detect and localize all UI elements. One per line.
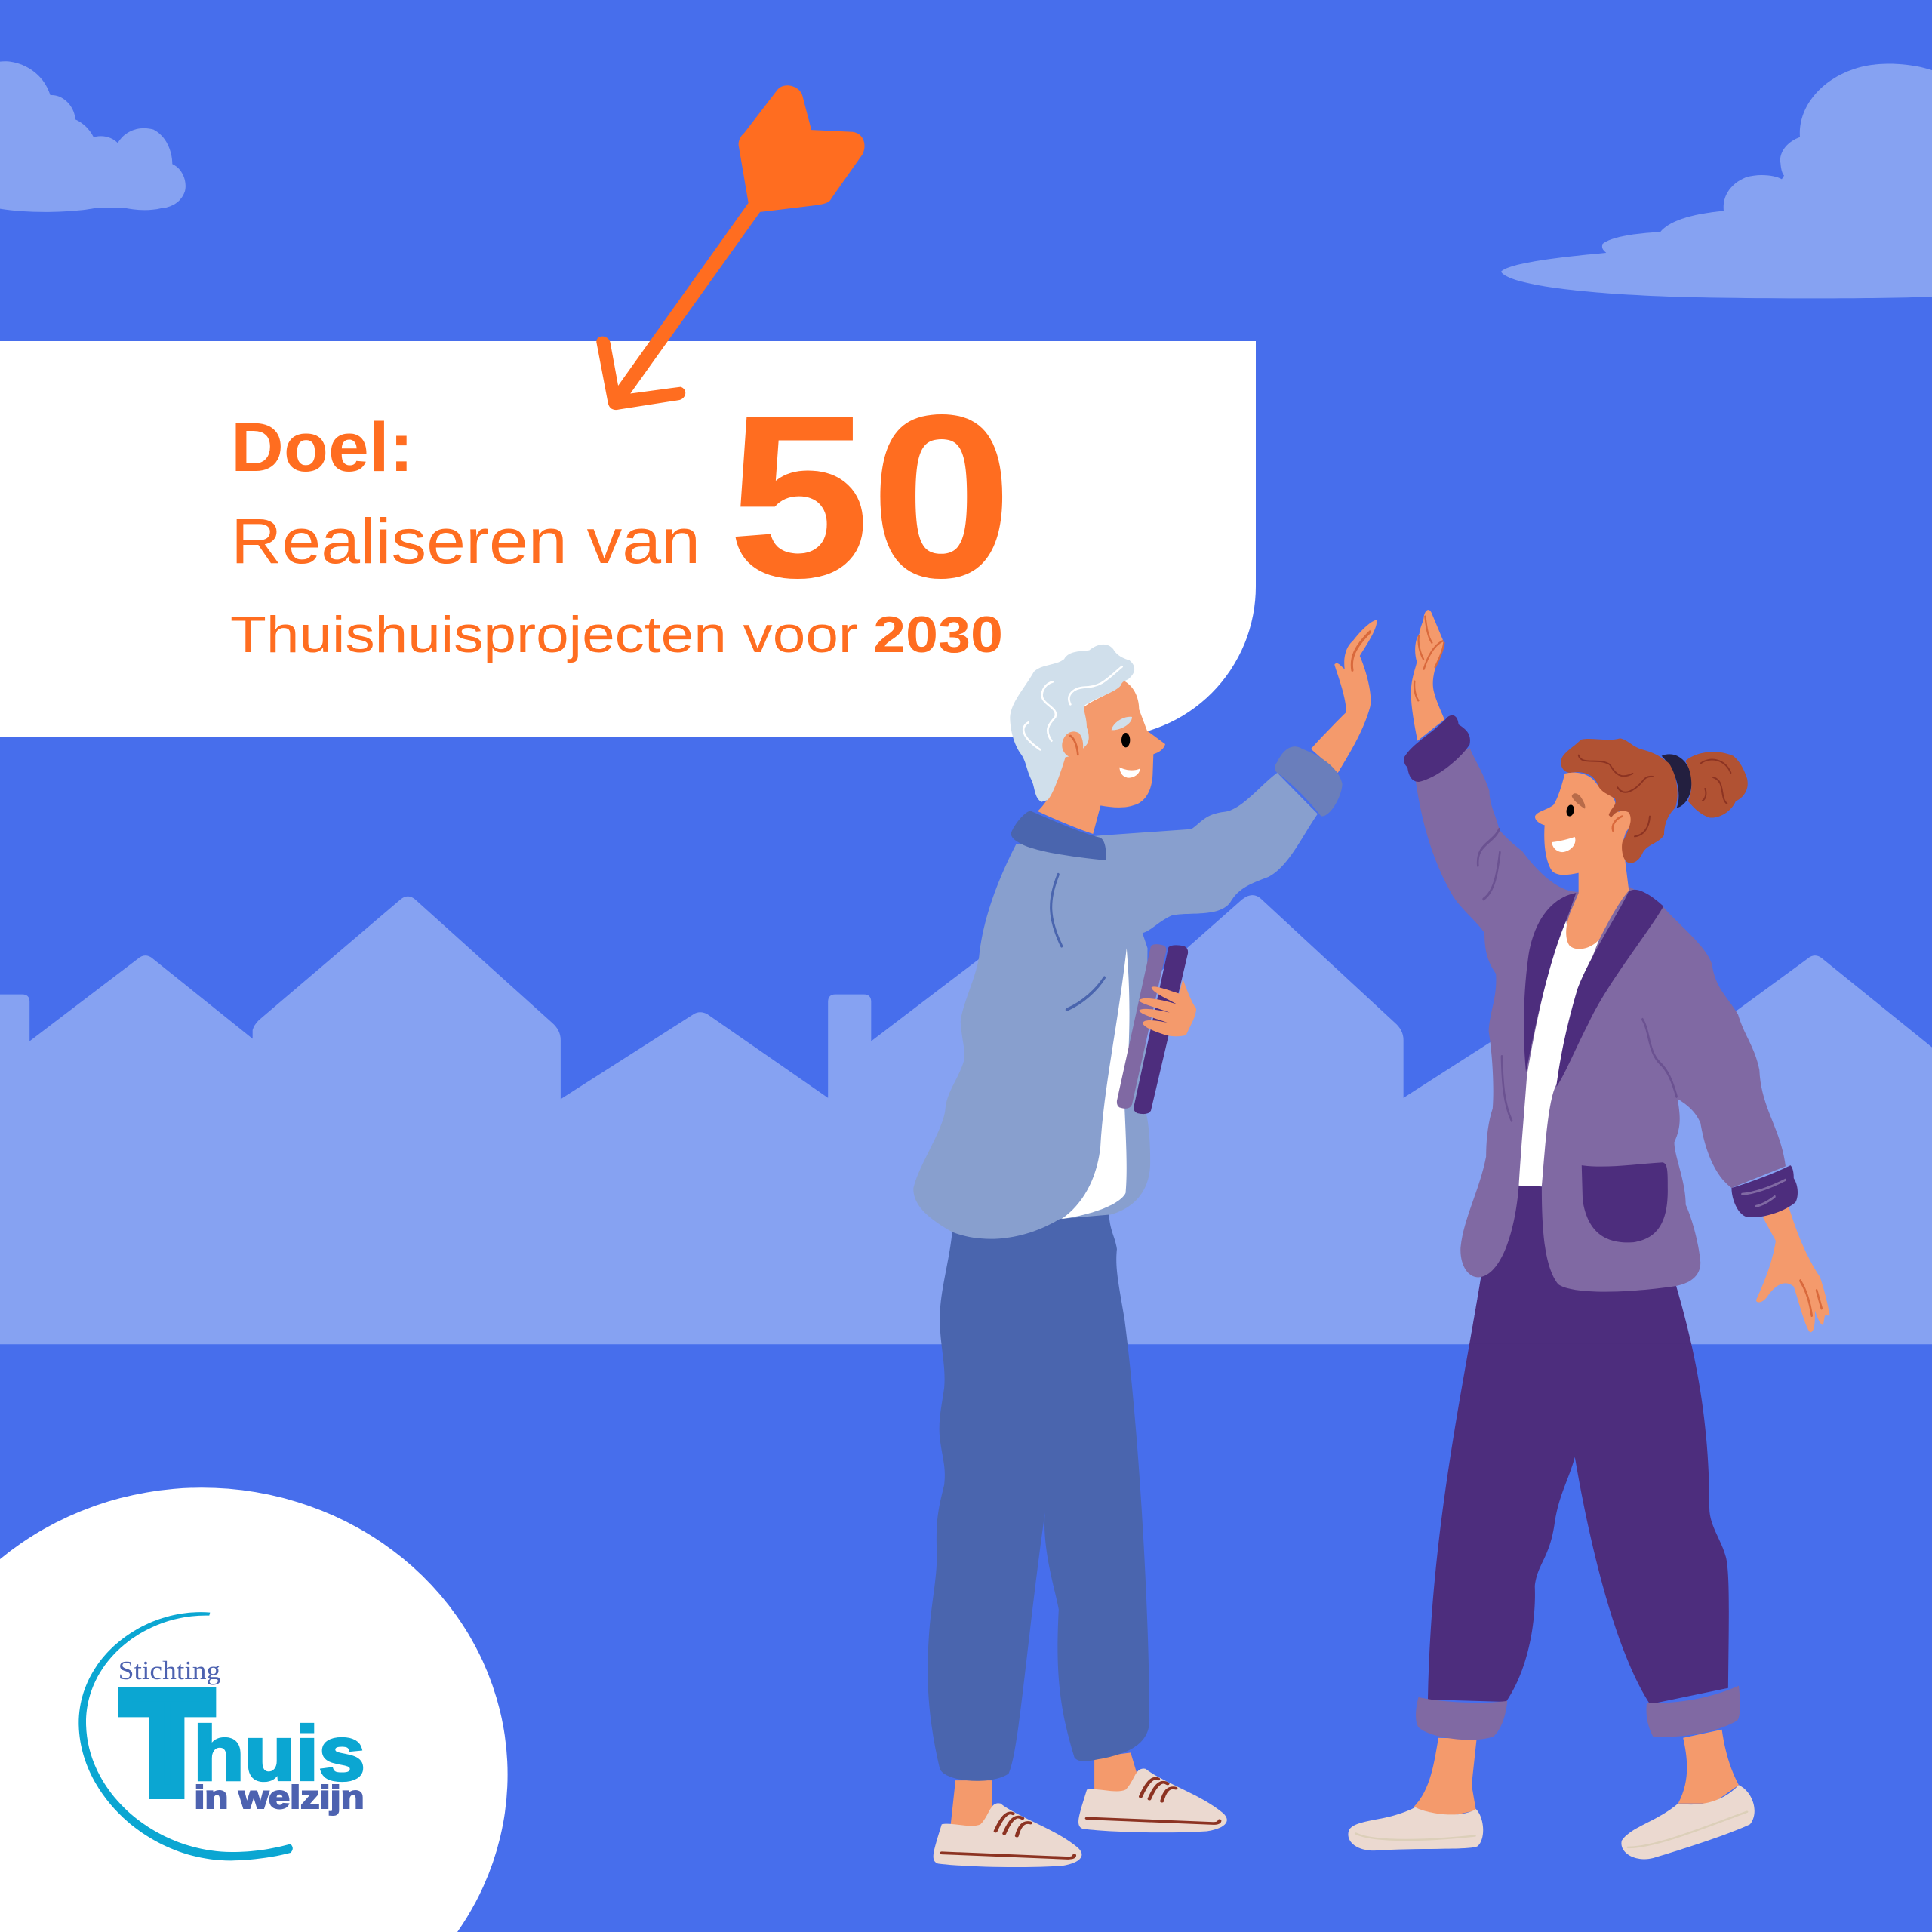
- woman raised arm: [1404, 610, 1470, 782]
- trousers: [1428, 1277, 1729, 1704]
- ankles: [1414, 1730, 1739, 1817]
- logo circle with logo: [0, 1487, 508, 1932]
- big number: 50: 50: [728, 367, 1013, 626]
- text: 2030: 2030: [873, 606, 1003, 663]
- figure: woman: [1348, 610, 1830, 1859]
- logo word: Stichting: Stichting: [118, 1656, 220, 1685]
- left trouser cuff: [1416, 1697, 1507, 1740]
- eyebrow: [1572, 793, 1585, 809]
- right shoe: [1621, 1785, 1755, 1859]
- shoe sole lines: [1356, 1812, 1747, 1847]
- lower sleeve cuff: [1731, 1165, 1798, 1217]
- text: Realiseren van: Realiseren van: [231, 506, 700, 577]
- woman legs and shoes: [1348, 1277, 1755, 1859]
- finger lines: [1352, 632, 1370, 670]
- hair strands: [1579, 755, 1730, 836]
- right trouser cuff: [1647, 1686, 1740, 1737]
- front shoe: [934, 1803, 1081, 1867]
- white shirt: [1062, 948, 1130, 1219]
- logo words: in welzijn: in welzijn: [194, 1780, 365, 1816]
- white circle: [0, 1487, 508, 1932]
- eye: [1565, 804, 1575, 817]
- jacket: [1416, 747, 1786, 1292]
- right lapel: [1556, 890, 1663, 1087]
- back shoe: [1078, 1768, 1227, 1832]
- cuff lines: [1742, 1180, 1786, 1206]
- white shirt: [1519, 921, 1599, 1186]
- logo ring: [78, 1612, 293, 1860]
- back shoe details: [1087, 1778, 1220, 1823]
- jacket folds: [1051, 875, 1104, 1010]
- hair highlights: [1023, 666, 1122, 749]
- left lapel: [1524, 893, 1576, 1072]
- sleeve cuff: [1275, 746, 1343, 817]
- logo: Stichting Thuis in welzijn: [78, 1612, 365, 1860]
- ear lines: [1613, 817, 1622, 831]
- cloud: top right: [1501, 63, 1932, 298]
- hand holding books: [1139, 979, 1196, 1036]
- book dark: [1134, 945, 1188, 1114]
- jacket: [913, 773, 1318, 1239]
- man head: [1010, 645, 1165, 860]
- ear: [1611, 811, 1631, 843]
- hair tie: [1662, 754, 1691, 808]
- arrow: orange dart pointing to the goal: [596, 85, 865, 410]
- neck and face: [1535, 773, 1630, 949]
- hair: [1561, 738, 1678, 863]
- ear: [1062, 731, 1083, 757]
- pocket: [1582, 1162, 1668, 1242]
- skyline of houses: [0, 895, 1932, 1344]
- eyebrow: [1112, 717, 1132, 730]
- raised hand: [1411, 610, 1444, 741]
- raised sleeve cuff: [1404, 715, 1470, 782]
- raised hand lines: [1414, 617, 1444, 700]
- smile: [1119, 768, 1140, 778]
- left shoe: [1348, 1807, 1483, 1850]
- man legs and shoes: [928, 1208, 1227, 1867]
- trousers: [928, 1208, 1149, 1781]
- ankles: [950, 1752, 1137, 1829]
- book light: [1117, 944, 1166, 1109]
- heading: Doel: Doel:: [231, 409, 414, 486]
- logo word: huis: huis: [193, 1710, 365, 1796]
- ear line: [1070, 736, 1078, 755]
- collar: [1011, 811, 1106, 860]
- trousers top: [1469, 1186, 1690, 1343]
- panel: white goal banner: [0, 341, 1256, 737]
- lower hand: [1756, 1208, 1830, 1332]
- man upper body: [913, 620, 1377, 1239]
- neck and face: [1038, 681, 1165, 834]
- figure: older man: [913, 620, 1377, 1867]
- lower hand lines: [1800, 1281, 1822, 1315]
- text: Thuishuisprojecten voor: Thuishuisprojecten voor: [230, 606, 858, 663]
- eye: [1121, 733, 1130, 747]
- smile: [1552, 837, 1575, 852]
- woman torso and arms: [1416, 747, 1830, 1343]
- hair bun: [1685, 752, 1748, 818]
- books and holding hand: [1117, 944, 1196, 1114]
- hair: [1010, 645, 1134, 802]
- woman head: [1535, 738, 1748, 949]
- jacket folds: [1478, 829, 1677, 1121]
- logo letter: T: T: [124, 1663, 211, 1822]
- raised arm hand: [1311, 620, 1377, 773]
- goal text block: [230, 367, 1013, 663]
- cloud: top left: [0, 61, 186, 212]
- front shoe details: [942, 1813, 1075, 1858]
